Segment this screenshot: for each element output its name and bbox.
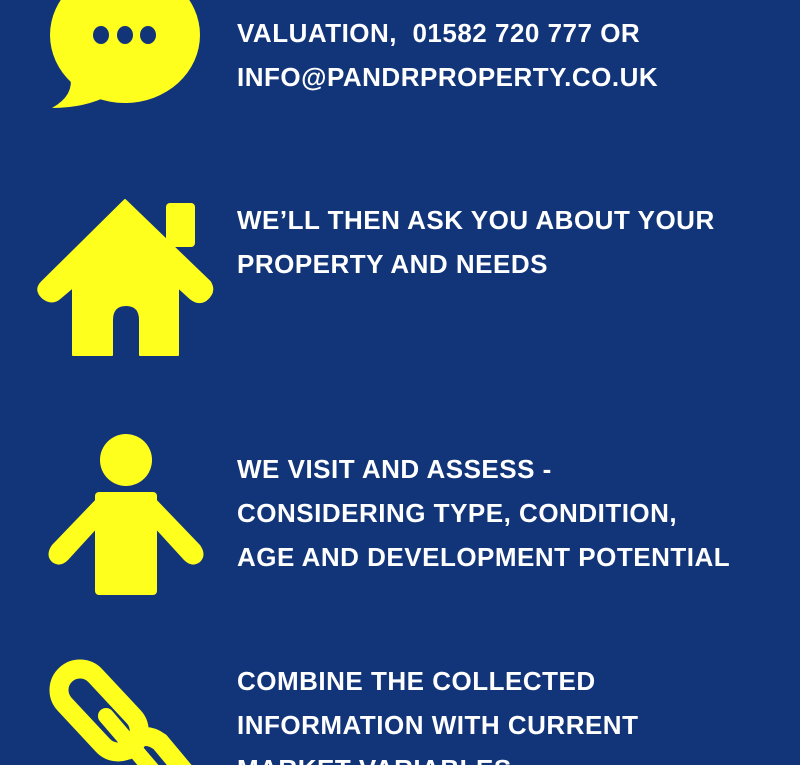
text: step 3: AGE AND DEVELOPMENT POTENTIAL [237,542,730,572]
text: step 4: COMBINE THE COLLECTED [237,666,596,696]
text: step 2 [237,205,715,279]
text: step 3: CONSIDERING TYPE, CONDITION, [237,498,677,528]
text: step 3 [237,454,730,572]
text: step 3: WE VISIT AND ASSESS - [237,454,552,484]
text: step 1: INFO@PANDRPROPERTY.CO.UK [237,62,658,92]
text: step 2: PROPERTY AND NEEDS [237,249,548,279]
text: step 1: VALUATION, 01582 720 777 OR [237,18,640,48]
text: step 4: INFORMATION WITH CURRENT [237,710,638,740]
text: step 4 [237,666,638,765]
text: step 1 [237,0,697,92]
text: step 2: WE’LL THEN ASK YOU ABOUT YOUR [237,205,715,235]
